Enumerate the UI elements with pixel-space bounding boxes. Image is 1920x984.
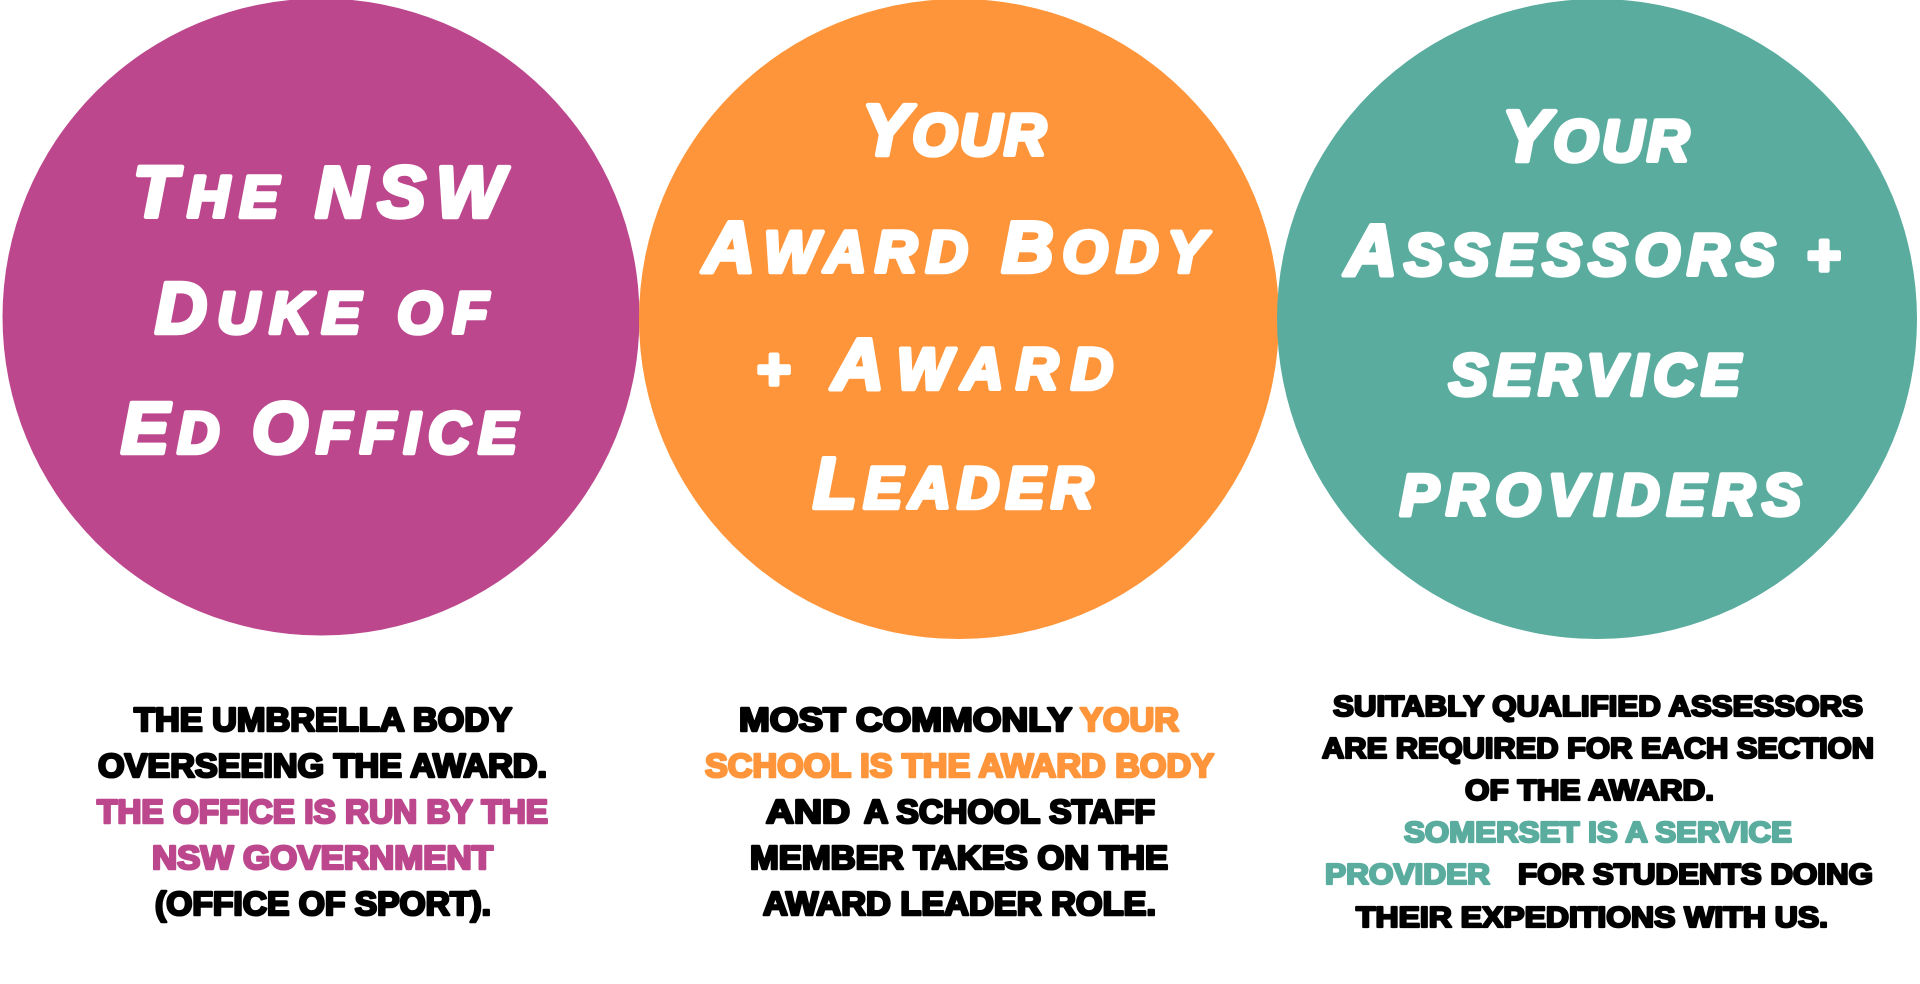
- description: school is the award body: AWARD LEADER ROLE.: [763, 885, 1156, 922]
- description: Somerset is a service provider: ARE REQUIRED FOR EACH SECTION: [1322, 733, 1874, 765]
- description: school is the award body: SCHOOL IS THE AWARD BODY: [705, 747, 1214, 784]
- description: umbrella body: THE UMBRELLA BODY: [134, 701, 512, 738]
- heading: Your Assessors + service providers: SERVICE: [1449, 343, 1742, 408]
- heading: Your Assessors + service providers: YOUR: [1502, 97, 1689, 177]
- heading: Your Award Body + Award Leader: + AWARD: [756, 325, 1113, 405]
- heading: Your Award Body + Award Leader: LEADER: [813, 444, 1093, 524]
- orange circle: [639, 0, 1279, 639]
- heading: Your Award Body + Award Leader: [701, 91, 1211, 524]
- description: umbrella body: (OFFICE OF SPORT).: [155, 885, 491, 922]
- panel: Your Assessors and Service Providers: [1277, 0, 1917, 934]
- description: umbrella body: [97, 701, 548, 922]
- description: Somerset is a service provider: SUITABLY QUALIFIED ASSESSORS: [1333, 691, 1863, 723]
- description: school is the award body: MOST COMMONLY: [739, 701, 1072, 738]
- description: school is the award body: AND: [766, 793, 850, 830]
- heading: Your Assessors + service providers: PROVIDERS: [1400, 463, 1801, 528]
- description: school is the award body: [705, 701, 1214, 922]
- panel: Your Award Body and Award Leader: [639, 0, 1279, 922]
- heading: Your Assessors + service providers: [1343, 97, 1840, 528]
- description: Somerset is a service provider: OF THE AWARD.: [1465, 775, 1714, 807]
- purple circle: [2, 0, 640, 636]
- teal circle: [1277, 0, 1917, 639]
- description: Somerset is a service provider: FOR STUDENTS DOING: [1518, 859, 1873, 891]
- description: school is the award body: YOUR: [1080, 701, 1179, 738]
- heading: Your Award Body + Award Leader: YOUR: [862, 91, 1046, 171]
- description: umbrella body: THE OFFICE IS RUN BY THE: [97, 793, 548, 830]
- heading: Your Assessors + service providers: ASSESSORS +: [1343, 211, 1840, 291]
- heading: The NSW Duke of Ed Office: ED OFFICE: [121, 389, 519, 469]
- description: Somerset is a service provider: PROVIDER: [1325, 859, 1490, 891]
- heading: The NSW Duke of Ed Office: [121, 153, 519, 469]
- heading: The NSW Duke of Ed Office: THE NSW: [133, 153, 510, 233]
- description: umbrella body: OVERSEEING THE AWARD.: [98, 747, 547, 784]
- heading: The NSW Duke of Ed Office: DUKE OF: [155, 269, 490, 349]
- description: Somerset is a service provider: [1322, 691, 1874, 934]
- description: school is the award body: MEMBER TAKES ON THE: [750, 839, 1168, 876]
- description: umbrella body: NSW GOVERNMENT: [152, 839, 493, 876]
- description: Somerset is a service provider: THEIR EXPEDITIONS WITH US.: [1356, 902, 1828, 934]
- panel: NSW Duke of Ed Office: [2, 0, 640, 922]
- description: school is the award body: A SCHOOL STAFF: [864, 793, 1155, 830]
- heading: Your Award Body + Award Leader: AWARD BODY: [701, 208, 1211, 288]
- description: Somerset is a service provider: SOMERSET IS A SERVICE: [1404, 817, 1792, 849]
